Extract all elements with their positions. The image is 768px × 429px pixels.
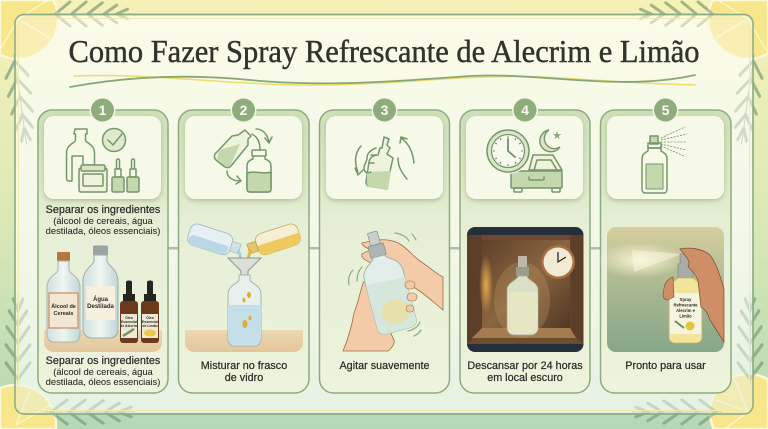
essential oil droppers: de Limão bbox=[142, 324, 158, 328]
illustration: hand spraying bottle: Spray bbox=[680, 297, 692, 302]
badge 5 bbox=[652, 97, 678, 123]
bottle bbox=[678, 254, 693, 278]
badge 1: 1 bbox=[99, 102, 107, 118]
badge 1 bbox=[90, 97, 116, 123]
step text top bbox=[46, 204, 161, 236]
decoration: top-right lemon and rosemary bbox=[637, 0, 768, 146]
badge 5: 5 bbox=[662, 102, 670, 118]
illustration: hand spraying bottle bbox=[596, 227, 724, 352]
icon: moon and star bbox=[540, 130, 562, 152]
bottom hand bbox=[343, 281, 394, 351]
badge 4 bbox=[512, 97, 538, 123]
step text bbox=[201, 360, 287, 384]
decoration: bottom-right lemon and rosemary bbox=[632, 295, 768, 429]
badge 3 bbox=[372, 97, 398, 123]
title underline swoosh bbox=[70, 75, 695, 87]
alcohol bottle: Álcool de bbox=[51, 303, 76, 310]
badge 2 bbox=[230, 97, 256, 123]
essential oil droppers: Essencial bbox=[142, 320, 158, 324]
essential oil droppers: Óleo bbox=[146, 315, 154, 320]
clock bbox=[541, 245, 575, 279]
badge 4: 4 bbox=[521, 102, 529, 118]
step text: em local escuro bbox=[487, 372, 563, 384]
title: Como Fazer Spray Refrescante de Alecrim e Limão bbox=[68, 33, 700, 69]
icon: drawer bbox=[511, 155, 562, 192]
icon: pouring between bottles bbox=[214, 129, 272, 192]
illustration: hand spraying bottle: Limão bbox=[679, 314, 692, 318]
card 4: descansar bbox=[460, 97, 590, 393]
step text: Misturar no frasco bbox=[201, 360, 287, 372]
illustration: hand spraying bottle: Alecrim e bbox=[676, 308, 696, 313]
water bottle: Água bbox=[93, 296, 109, 303]
bottle bbox=[518, 256, 527, 267]
step text bottom: (álcool de cereais, água bbox=[53, 366, 154, 377]
step text top: destilada, óleos essenciais) bbox=[46, 225, 160, 236]
card 3: agitar bbox=[320, 97, 450, 393]
step text: de vidro bbox=[225, 372, 263, 384]
icon: spray bottle bbox=[642, 127, 687, 193]
badge 2: 2 bbox=[240, 102, 248, 118]
hand bbox=[680, 248, 724, 342]
step text bottom bbox=[46, 355, 161, 387]
essential oil droppers: Essencial bbox=[121, 320, 137, 324]
icon: clock bbox=[485, 128, 531, 174]
illustration: mixing in glass jar bbox=[185, 222, 303, 352]
alcohol bottle bbox=[47, 252, 80, 342]
illustration: ingredient bottles on table bbox=[44, 246, 162, 352]
card 5: pronto bbox=[596, 97, 731, 393]
right tilted bottle bbox=[245, 222, 302, 259]
illustration: bottle in dark cabinet bbox=[467, 227, 584, 352]
essential oil droppers bbox=[120, 280, 159, 343]
icon: moon and star: ★ bbox=[552, 130, 562, 142]
water bottle bbox=[83, 246, 118, 338]
funnel bbox=[228, 258, 261, 280]
essential oil droppers: Óleo bbox=[125, 315, 133, 320]
card 1: separar os ingredientes bbox=[38, 97, 168, 393]
illustration: hand spraying bottle: Refrescante bbox=[674, 302, 698, 308]
step text: Agitar suavemente bbox=[339, 360, 430, 372]
alcohol bottle: Cereais bbox=[54, 311, 73, 317]
jar bbox=[228, 275, 261, 346]
decoration: top-left lemon and rosemary bbox=[0, 0, 131, 146]
essential oil droppers: de Alecrim bbox=[120, 324, 138, 328]
bottle bbox=[353, 227, 418, 336]
decoration: bottom-left lemon and rosemary bbox=[0, 295, 135, 429]
step text: Descansar por 24 horas bbox=[467, 360, 583, 372]
icon: hand shaking bottle bbox=[355, 137, 414, 190]
fingers bbox=[405, 281, 417, 312]
step text bottom: destilada, óleos essenciais) bbox=[46, 376, 160, 387]
step text bbox=[467, 360, 583, 384]
icon: bottles and jars with checkmark bbox=[66, 128, 139, 192]
step text top: Separar os ingredientes bbox=[46, 204, 161, 216]
step text: Pronto para usar bbox=[625, 360, 706, 372]
left tilted bottle bbox=[186, 222, 243, 259]
connector bars between cards bbox=[168, 247, 601, 250]
illustration: hands shaking bottle bbox=[343, 227, 443, 351]
water bottle: Destilada bbox=[87, 304, 114, 310]
badge 3: 3 bbox=[381, 102, 389, 118]
step text top: (álcool de cereais, água bbox=[53, 215, 154, 226]
top hand bbox=[362, 240, 443, 310]
card 2: misturar bbox=[178, 97, 309, 393]
step text bottom: Separar os ingredientes bbox=[46, 355, 161, 367]
